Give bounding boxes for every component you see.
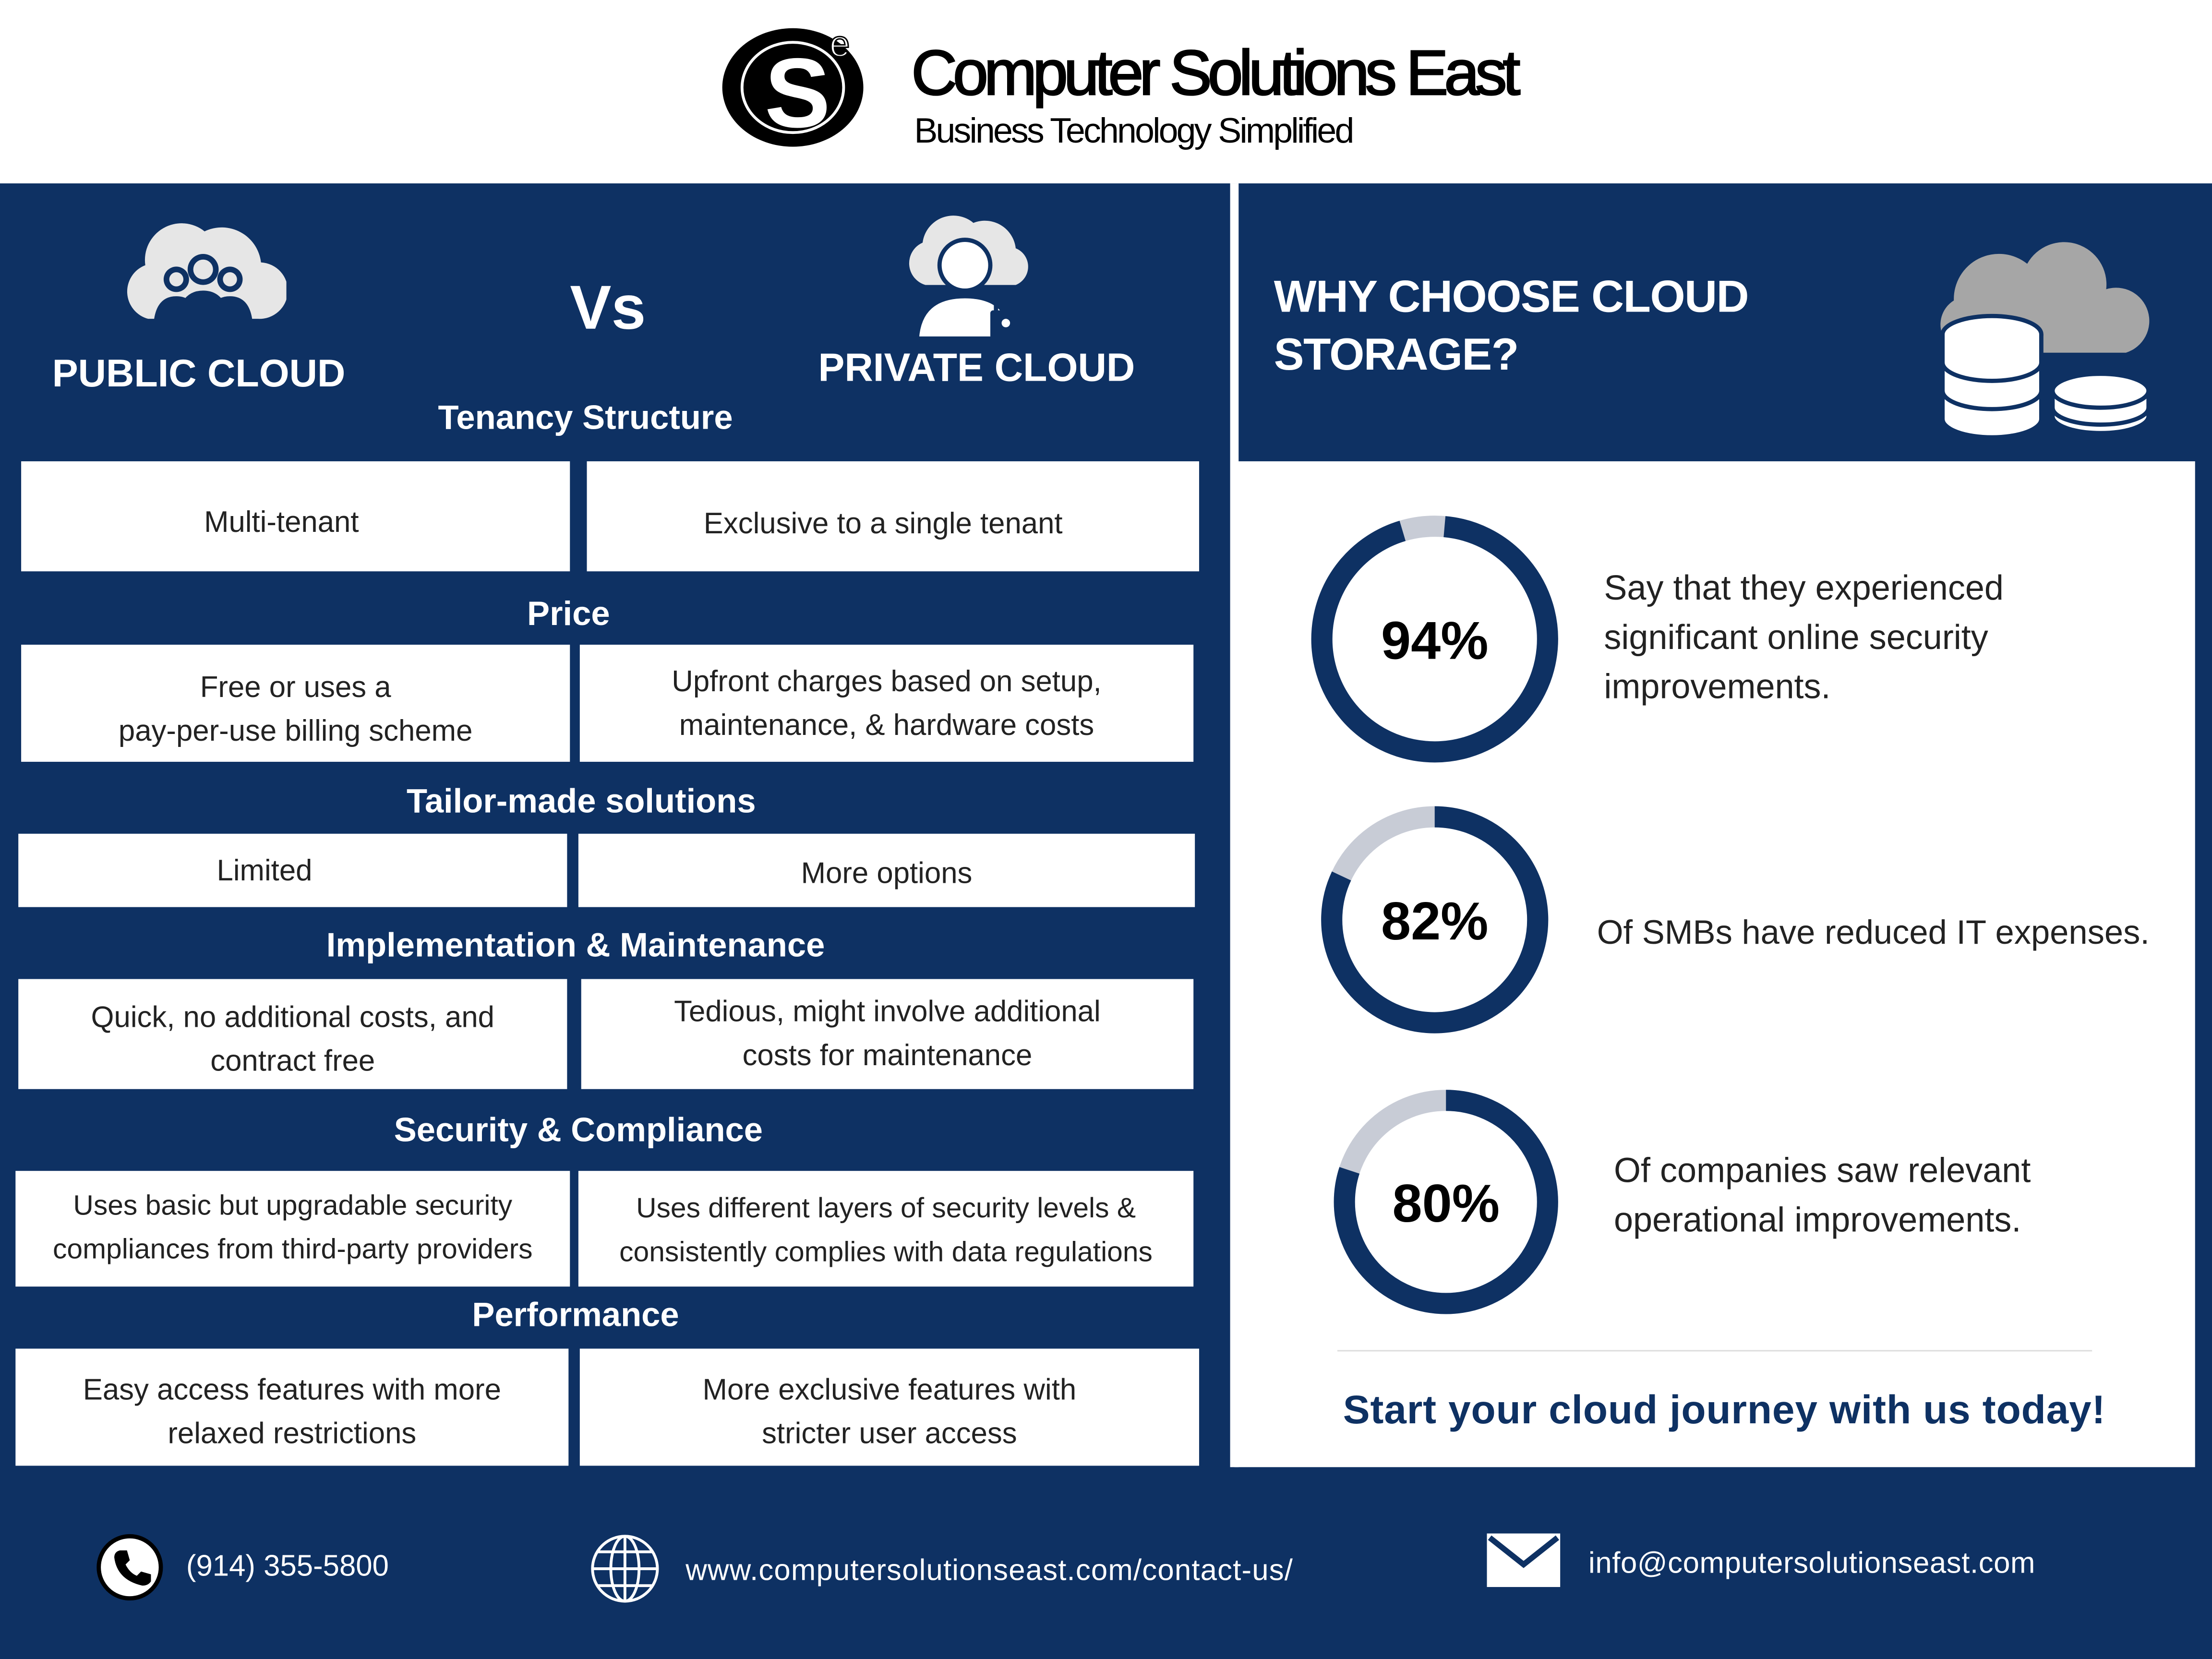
row: tenancy — [21, 461, 1199, 571]
stat 94% — [1311, 516, 2004, 762]
tagline: Business Technology Simplified — [914, 111, 1353, 151]
heading: implementation: Implementation & Maintenance — [326, 927, 825, 965]
icon: public cloud — [127, 223, 287, 319]
stat 82% — [1321, 806, 2150, 1034]
icon: cloud storage — [1940, 242, 2150, 435]
row: security: compliances from third-party providers — [53, 1234, 533, 1265]
icon: globe — [589, 1533, 660, 1604]
heading: why choose cloud storage: WHY CHOOSE CLOUD — [1274, 271, 1748, 322]
heading: security: Security & Compliance — [394, 1112, 763, 1150]
row: price: maintenance, & hardware costs — [679, 709, 1094, 741]
row: tailor: Limited — [217, 854, 312, 887]
row: security: Uses basic but upgradable security — [73, 1190, 512, 1222]
divider — [1230, 183, 1238, 1467]
row: implementation: Quick, no additional costs, and — [91, 1002, 494, 1034]
row: security: consistently complies with data regulations — [619, 1237, 1153, 1268]
heading: performance: Performance — [472, 1297, 679, 1334]
email: info@computersolutionseast.com — [1588, 1548, 2035, 1580]
stat 80% — [1334, 1090, 2031, 1314]
row: performance: relaxed restrictions — [168, 1417, 416, 1450]
company name: Computer Solutions East — [911, 36, 1516, 108]
row: implementation: contract free — [210, 1046, 375, 1078]
logo mark: e — [830, 24, 850, 65]
row: performance: Easy access features with more — [83, 1373, 501, 1406]
donut 94 — [1311, 516, 1558, 762]
row: price: Upfront charges based on setup, — [672, 665, 1102, 697]
row: tenancy: Exclusive to a single tenant — [704, 507, 1063, 540]
white stats panel — [1234, 461, 2195, 1467]
logo mark: S — [765, 37, 830, 148]
text 80: Of companies saw relevant — [1614, 1153, 2031, 1190]
heading: price: Price — [527, 595, 610, 634]
row: price: Free or uses a — [200, 671, 391, 703]
row: price: pay-per-use billing scheme — [119, 714, 472, 747]
header — [0, 0, 2212, 183]
heading: public cloud: PUBLIC CLOUD — [52, 351, 345, 395]
row: implementation: costs for maintenance — [743, 1040, 1032, 1072]
row: performance: stricter user access — [762, 1417, 1017, 1450]
heading: why choose cloud storage — [1274, 271, 1748, 380]
row: implementation — [18, 979, 1193, 1089]
row: security — [15, 1171, 1193, 1286]
website: www.computersolutionseast.com/contact-us/ — [685, 1555, 1293, 1587]
donut 80: 80% — [1393, 1173, 1500, 1233]
heading: tailor-made: Tailor-made solutions — [407, 783, 756, 821]
call to action: Start your cloud journey with us today! — [1343, 1388, 2105, 1433]
donut 80 — [1334, 1090, 1558, 1314]
text 82: Of SMBs have reduced IT expenses. — [1597, 914, 2150, 952]
row: tailor: More options — [801, 857, 972, 890]
footer — [96, 1533, 2035, 1602]
vs: Vs — [570, 274, 646, 343]
text 94: Say that they experienced — [1604, 570, 2004, 608]
row: tenancy: Multi-tenant — [204, 506, 359, 538]
row: tailor — [18, 833, 1195, 907]
row: performance: More exclusive features with — [703, 1373, 1076, 1406]
logo mark — [722, 24, 864, 148]
text 94 — [1604, 570, 2004, 707]
heading: why choose cloud storage: STORAGE? — [1274, 329, 1518, 380]
text 80: operational improvements. — [1614, 1202, 2021, 1240]
text 94: significant online security — [1604, 619, 1988, 657]
text 80 — [1614, 1153, 2031, 1240]
heading: private cloud: PRIVATE CLOUD — [818, 346, 1135, 389]
row: price — [21, 645, 1193, 762]
phone: (914) 355-5800 — [186, 1551, 389, 1583]
icon: mail — [1487, 1533, 1560, 1587]
donut 82: 82% — [1381, 891, 1488, 951]
heading: tenancy: Tenancy Structure — [438, 399, 733, 437]
icon: private cloud — [909, 216, 1028, 337]
text 94: improvements. — [1604, 669, 1831, 707]
donut 82 — [1321, 806, 1549, 1034]
row: security: Uses different layers of security levels & — [636, 1193, 1136, 1225]
icon: phone — [96, 1534, 163, 1600]
row: performance — [15, 1348, 1199, 1466]
donut 94: 94% — [1381, 610, 1488, 670]
row: implementation: Tedious, might involve additional — [674, 996, 1101, 1028]
